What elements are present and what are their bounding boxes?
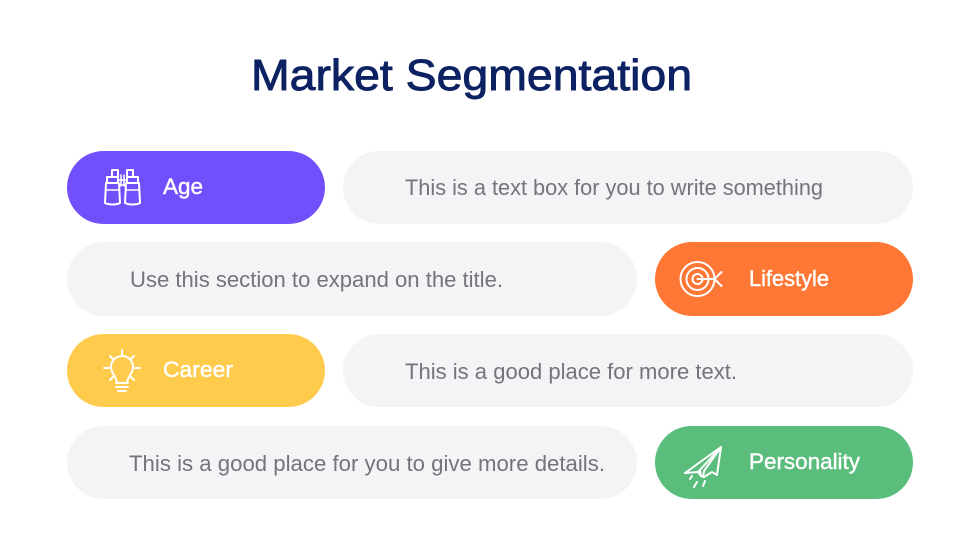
row: age: [67, 151, 913, 224]
row: lifestyle: [67, 242, 913, 316]
text box: personality: [67, 426, 637, 499]
label: personality: Personality: [749, 449, 860, 474]
label: career: Career: [163, 357, 233, 382]
icon: paper plane: [685, 447, 721, 487]
description: personality: This is a good place for you to give more details.: [129, 451, 605, 476]
pill: lifestyle: [655, 242, 913, 316]
pill: career: [67, 334, 325, 407]
description: age: This is a text box for you to write something: [405, 175, 823, 200]
row: career: [67, 334, 913, 407]
title: Market Segmentation: [251, 51, 692, 100]
text box: career: [343, 334, 913, 407]
label: lifestyle: Lifestyle: [749, 266, 829, 291]
text box: age: [343, 151, 913, 224]
row: personality: [67, 426, 913, 499]
description: career: This is a good place for more text.: [405, 359, 737, 384]
description: lifestyle: Use this section to expand on the title.: [130, 267, 503, 292]
pill: personality: [655, 426, 913, 499]
icon: light bulb: [104, 350, 140, 391]
icon: target: [680, 262, 722, 296]
text box: lifestyle: [67, 242, 637, 316]
label: age: Age: [163, 174, 203, 199]
pill: age: [67, 151, 325, 224]
icon: binoculars: [105, 170, 140, 204]
